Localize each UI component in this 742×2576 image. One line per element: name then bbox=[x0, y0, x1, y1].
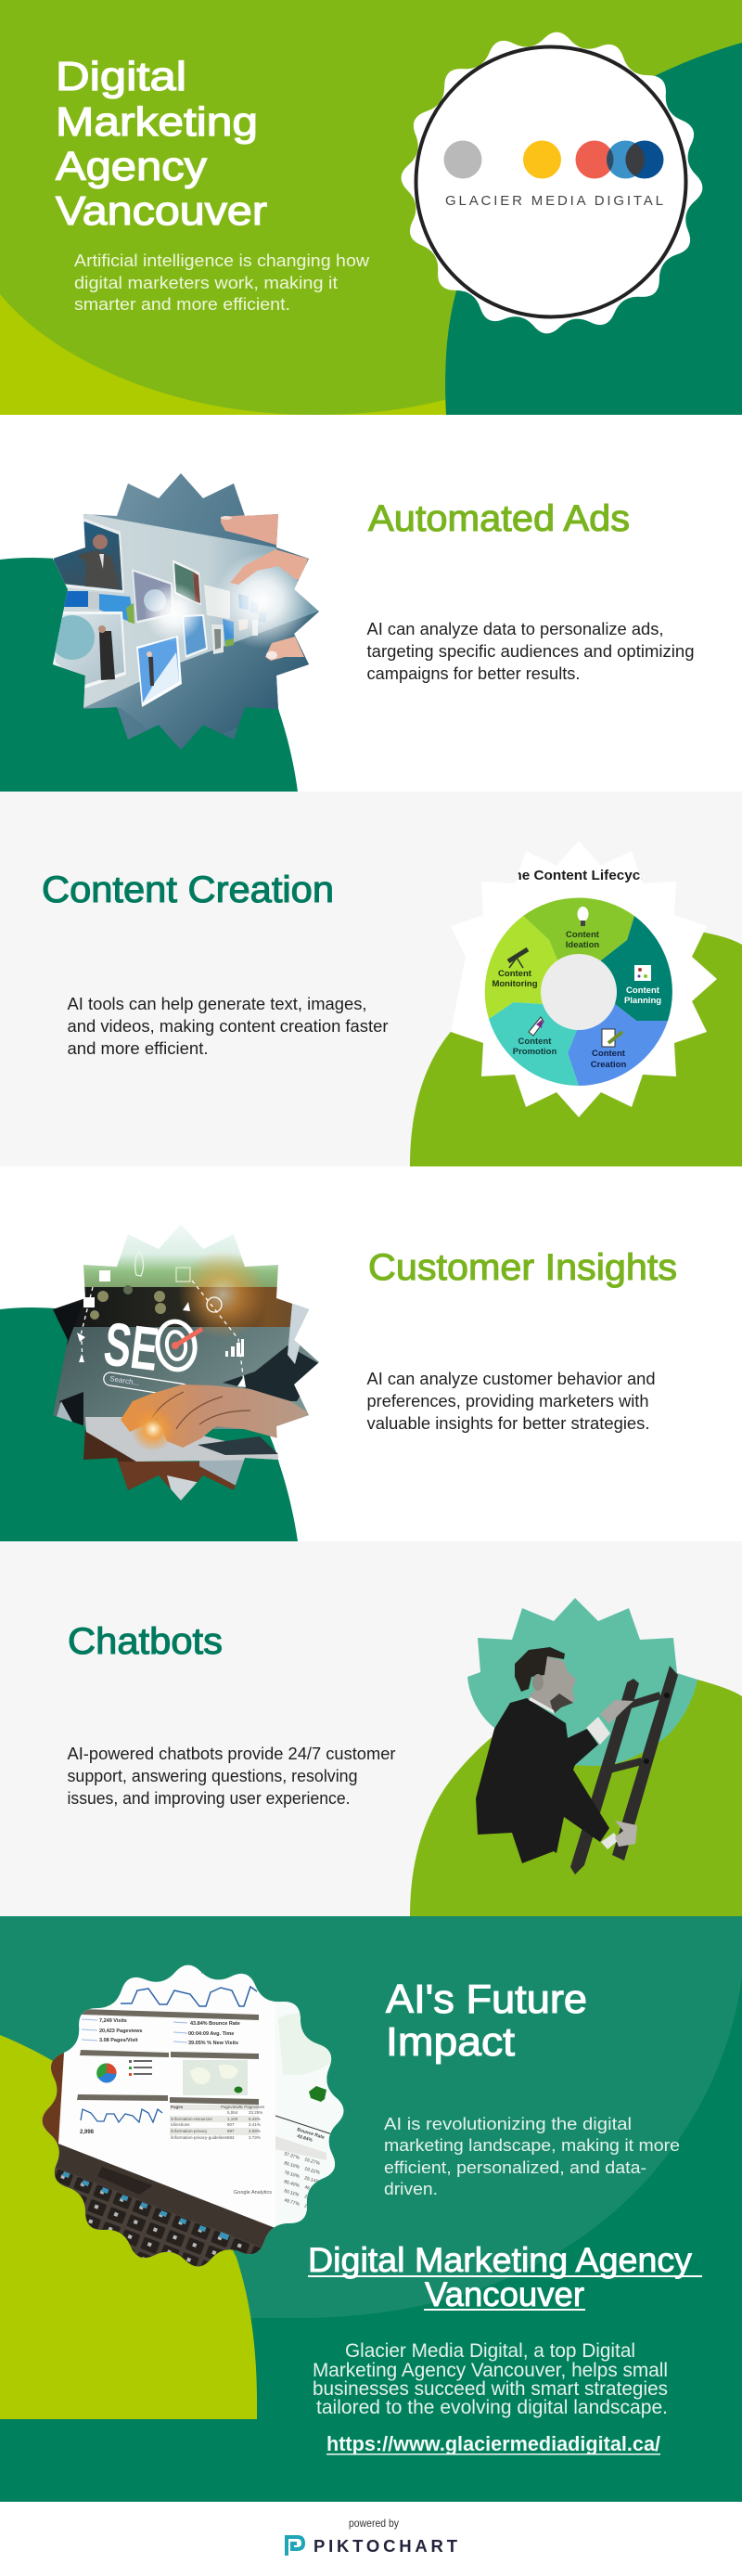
icon: megaphone bbox=[529, 1017, 544, 1036]
heading: AI's Future bbox=[386, 1977, 587, 2022]
photo: analytics report: 37.37% bbox=[283, 2151, 301, 2161]
logo badge: GLACIER MEDIA DIGITAL bbox=[445, 193, 663, 209]
photo: analytics report: Bounce Rate bbox=[296, 2127, 326, 2141]
centre panels bbox=[132, 569, 173, 624]
photo: analytics report: 15.27% bbox=[303, 2157, 321, 2167]
photo: analytics report: Pageviews bbox=[221, 2105, 242, 2109]
photo: SEO: Search... bbox=[109, 1374, 140, 1387]
photo: analytics report: 20,423 Pageviews bbox=[99, 2029, 142, 2034]
photo: analytics report: 683 bbox=[227, 2135, 235, 2140]
agency heading: Digital Marketing Agency bbox=[308, 2241, 693, 2279]
photo: analytics report: Apr 1 bbox=[201, 1970, 215, 1976]
SEO lettering: SE bbox=[100, 1308, 162, 1384]
intro text bbox=[74, 251, 370, 314]
hands bbox=[121, 1385, 309, 1448]
wheel labels: Creation bbox=[591, 1060, 626, 1070]
photo: analytics report: 85.10% bbox=[283, 2160, 301, 2170]
photo: analytics report: 39.05% % New Visits bbox=[188, 2041, 238, 2046]
photo: analytics report: 1,100 bbox=[227, 2117, 238, 2121]
heading: Customer Insights bbox=[368, 1247, 677, 1288]
photo: SEO bbox=[53, 1225, 319, 1501]
title bbox=[56, 54, 267, 234]
photo: analytics report: 78.10% bbox=[283, 2170, 301, 2180]
icon: bulb bbox=[577, 907, 588, 926]
photo: video wall bbox=[53, 473, 319, 750]
wheel labels: Content bbox=[592, 1049, 626, 1059]
body text: marketing landscape, making it more bbox=[384, 2136, 680, 2155]
footer: powered by: PIKTOCHART bbox=[313, 2536, 458, 2556]
photo: analytics report: Google Analytics bbox=[234, 2190, 272, 2196]
icon: piktochart logo bbox=[287, 2537, 303, 2556]
photo: analytics report: % Pageviews bbox=[239, 2105, 265, 2109]
photo: analytics report: 50.11% bbox=[283, 2188, 301, 2198]
green blob bbox=[0, 1307, 298, 1541]
icon: document and pencil bbox=[602, 1029, 622, 1047]
body text: issues, and improving user experience. bbox=[67, 1789, 351, 1808]
photo: analytics report: 807 bbox=[227, 2122, 235, 2127]
title: Vancouver bbox=[56, 188, 267, 234]
photo: analytics report: 28.44% bbox=[303, 2194, 321, 2204]
man in suit bbox=[476, 1647, 637, 1863]
wheel labels: Monitoring bbox=[492, 979, 538, 989]
photo: analytics report: 49.77% bbox=[283, 2197, 301, 2208]
body text: and more efficient. bbox=[67, 1039, 208, 1058]
blue strips bbox=[64, 591, 88, 607]
hand bbox=[221, 513, 279, 547]
photo: analytics report: 897 bbox=[227, 2129, 235, 2133]
intro text: Artificial intelligence is changing how bbox=[74, 251, 370, 270]
wheel labels: Content bbox=[498, 969, 532, 979]
green blob bbox=[0, 558, 298, 792]
globe panel bbox=[53, 612, 126, 689]
keyboard bbox=[54, 2144, 275, 2266]
second report sheet bbox=[275, 2116, 332, 2134]
green blob bbox=[410, 1675, 742, 1916]
photo: analytics report: 3.41% bbox=[249, 2122, 261, 2127]
title: Agency bbox=[56, 144, 207, 189]
ladder bbox=[570, 1666, 678, 1874]
heading bbox=[386, 1977, 587, 2065]
website link: https://www.glaciermediadigital.ca/ bbox=[326, 2432, 660, 2455]
photo: analytics report: 33.25% bbox=[249, 2110, 262, 2115]
teal star bbox=[467, 1598, 697, 1766]
wheel labels: Content bbox=[518, 1037, 552, 1047]
photo: analytics report: 5.44% bbox=[249, 2117, 261, 2121]
intro text: smarter and more efficient. bbox=[74, 295, 290, 314]
footer: powered by bbox=[0, 2502, 742, 2576]
photo: analytics report: 3.08 Pages/Visit bbox=[99, 2038, 138, 2043]
panel: header bbox=[0, 0, 742, 415]
photo: analytics report: 3.59% bbox=[249, 2129, 261, 2133]
photo: analytics report: Pages bbox=[171, 2105, 184, 2109]
photo: analytics report: 2,998 bbox=[80, 2130, 95, 2135]
heading: Automated Ads bbox=[368, 498, 630, 539]
agency text: businesses succeed with smart strategies bbox=[313, 2378, 668, 2400]
photo: analytics report: 7,249 Visits bbox=[99, 2018, 127, 2024]
body text bbox=[367, 1370, 655, 1433]
body text: targeting specific audiences and optimizing bbox=[367, 642, 694, 661]
dark green curve bbox=[445, 43, 742, 415]
wheel labels: Promotion bbox=[513, 1047, 556, 1057]
lime curve bbox=[0, 2035, 257, 2419]
photo: analytics report: 46.51% bbox=[303, 2184, 321, 2195]
photo: analytics report: 3.73% bbox=[249, 2135, 261, 2140]
title: Marketing bbox=[56, 99, 258, 145]
body text: efficient, personalized, and data- bbox=[384, 2158, 646, 2177]
heading: Impact bbox=[386, 2019, 515, 2065]
body text bbox=[67, 1745, 396, 1808]
agency heading: Vancouver bbox=[425, 2275, 584, 2313]
body text bbox=[384, 2115, 680, 2198]
lime curve bbox=[0, 294, 447, 415]
photo: analytics report: /directions bbox=[171, 2122, 190, 2127]
agency text: tailored to the evolving digital landscape. bbox=[316, 2397, 668, 2418]
body text: AI can analyze customer behavior and bbox=[367, 1370, 655, 1388]
panel: automated ads bbox=[0, 473, 694, 792]
agency text: Glacier Media Digital, a top Digital bbox=[345, 2340, 635, 2362]
keyboard bbox=[83, 1429, 136, 1464]
photo: analytics report: 00:04:09 Avg. Time bbox=[188, 2031, 234, 2037]
photo: analytics report: 43.84% Bounce Rate bbox=[190, 2021, 240, 2027]
lifecycle wheel bbox=[485, 897, 672, 1086]
agency text bbox=[313, 2340, 668, 2418]
wheel labels: Ideation bbox=[566, 940, 599, 950]
body text bbox=[67, 995, 388, 1058]
panel: customer insights bbox=[0, 1225, 677, 1541]
panel: future impact bbox=[0, 1916, 742, 2502]
body text: support, answering questions, resolving bbox=[67, 1767, 358, 1785]
photo: analytics report: 19.22% bbox=[303, 2166, 321, 2176]
photo: analytics report: 25.14% bbox=[303, 2175, 321, 2185]
photo: analytics report: 85.40% bbox=[283, 2179, 301, 2189]
body text bbox=[367, 620, 694, 683]
body text: driven. bbox=[384, 2180, 438, 2198]
body text: AI tools can help generate text, images, bbox=[67, 995, 367, 1013]
panel: chatbots bbox=[0, 1541, 742, 1916]
body text: AI is revolutionizing the digital bbox=[384, 2115, 632, 2133]
body text: AI can analyze data to personalize ads, bbox=[367, 620, 664, 638]
wheel labels: Content bbox=[626, 985, 660, 996]
footer: powered by: powered by bbox=[349, 2517, 399, 2530]
photo: analytics report bbox=[43, 1965, 343, 2266]
intro text: digital marketers work, making it bbox=[74, 274, 338, 292]
logo badge bbox=[396, 27, 708, 339]
wheel labels: Planning bbox=[624, 996, 661, 1006]
photo: analytics report: /information-privacy-guidelines bbox=[171, 2135, 228, 2140]
agency heading bbox=[308, 2241, 702, 2313]
photo: analytics report: 28.57% bbox=[303, 2203, 321, 2213]
heading: Content Creation bbox=[42, 869, 334, 910]
icon: planner bbox=[634, 965, 651, 981]
agency text: Marketing Agency Vancouver, helps small bbox=[313, 2360, 668, 2381]
photo: analytics report: 5,554 bbox=[227, 2110, 238, 2115]
content lifecycle image: The Content Lifecycle bbox=[505, 868, 652, 883]
heading: Chatbots bbox=[68, 1621, 223, 1662]
body text: campaigns for better results. bbox=[367, 664, 581, 683]
wheel labels: Content bbox=[566, 930, 600, 940]
green blob bbox=[410, 930, 742, 1166]
body text: AI-powered chatbots provide 24/7 customer bbox=[67, 1745, 396, 1763]
content lifecycle image bbox=[441, 841, 717, 1117]
top man panel bbox=[53, 518, 124, 593]
body text: and videos, making content creation faster bbox=[67, 1017, 388, 1036]
title: Digital bbox=[56, 54, 186, 99]
lighter curve bbox=[0, 1916, 742, 2318]
photo: analytics report: 43.84% bbox=[296, 2133, 313, 2144]
panel: content creation bbox=[0, 792, 742, 1166]
photo: analytics report: /information-resources bbox=[171, 2117, 213, 2121]
body text: valuable insights for better strategies. bbox=[367, 1414, 649, 1433]
icon: telescope bbox=[508, 949, 528, 968]
photo: analytics report: /information-privacy bbox=[171, 2129, 208, 2133]
body text: preferences, providing marketers with bbox=[367, 1392, 649, 1410]
wheel labels bbox=[492, 930, 661, 1070]
